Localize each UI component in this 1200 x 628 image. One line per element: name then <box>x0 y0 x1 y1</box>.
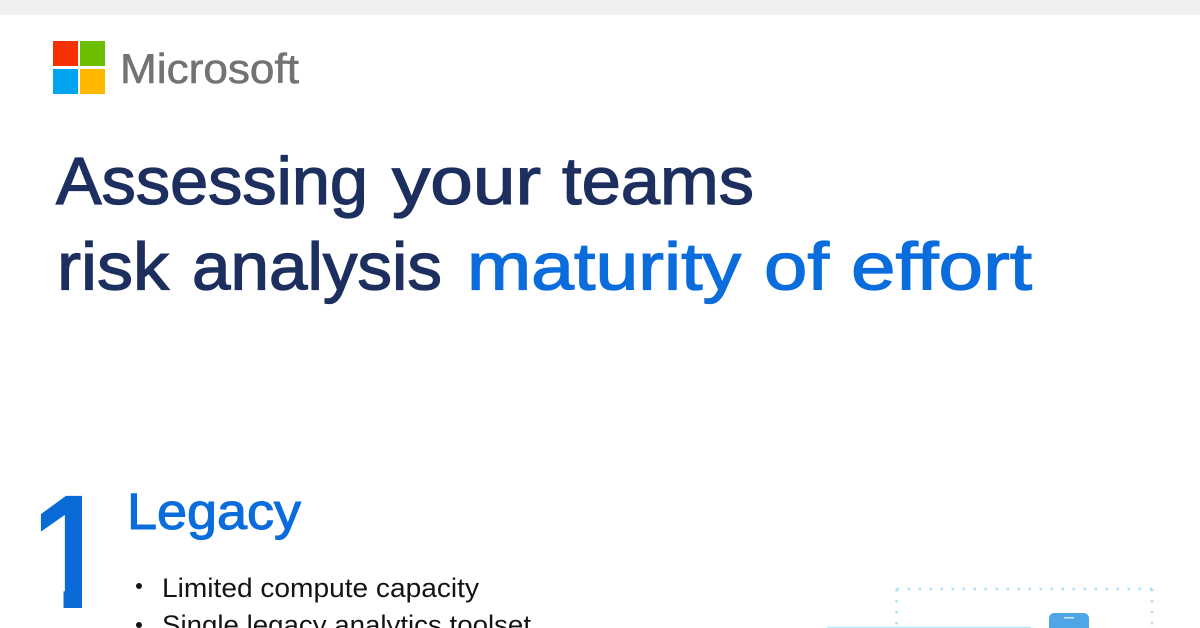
bullet: Limited compute capacity: Limited compute capacity <box>162 573 480 603</box>
heading: Legacy: Legacy <box>127 483 302 540</box>
icon: Microsoft logo squares <box>53 41 105 94</box>
title <box>56 144 1032 304</box>
title: your <box>392 144 541 219</box>
title: teams <box>562 144 754 219</box>
bullet list <box>136 573 532 628</box>
illustration: dotted frame with device <box>827 589 1153 628</box>
title: effort <box>851 230 1032 304</box>
Microsoft wordmark: Microsoft <box>120 45 299 92</box>
title: Assessing <box>56 144 368 219</box>
title: analysis <box>192 230 442 304</box>
title: risk <box>57 230 170 304</box>
top grey band <box>0 0 1200 15</box>
title: maturity <box>467 230 742 304</box>
title: of <box>764 230 829 304</box>
